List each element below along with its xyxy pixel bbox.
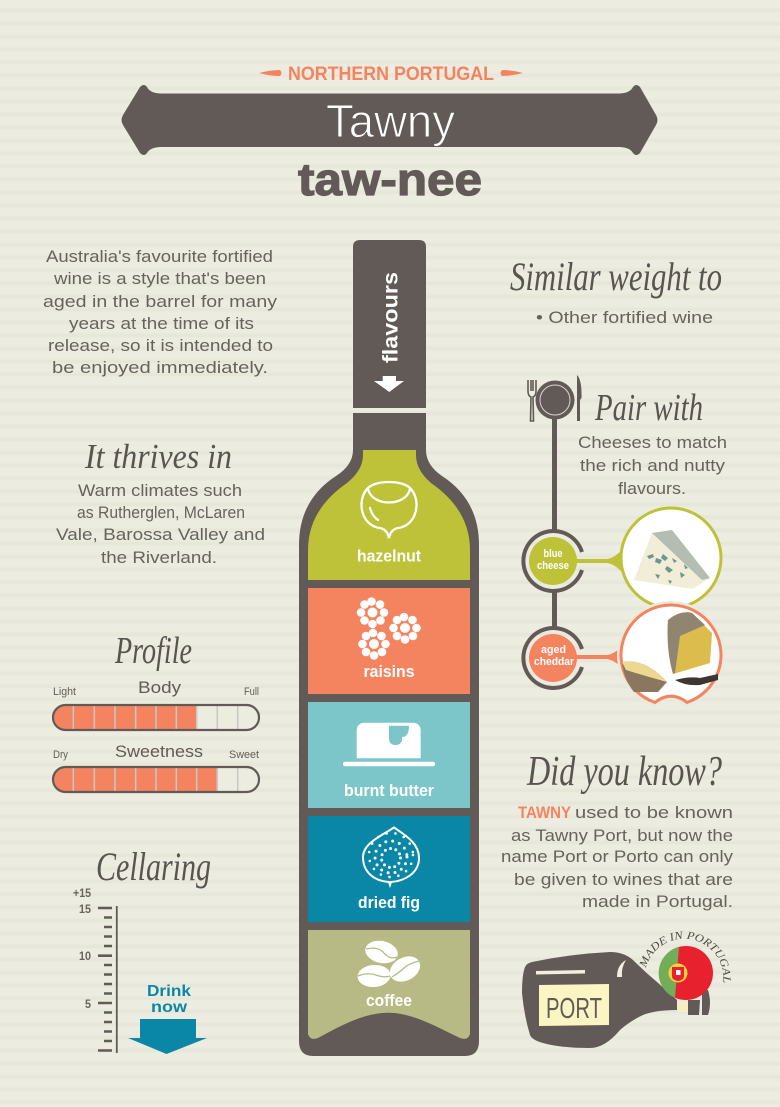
bottle neck with flavours label: flavours xyxy=(380,272,402,363)
intro text xyxy=(43,247,278,377)
flavour: dried fig: dried fig xyxy=(358,893,420,912)
did you know text: as Tawny Port, but now the xyxy=(511,826,733,845)
icon: plate and cutlery with connector xyxy=(528,375,582,630)
pairing text: flavours. xyxy=(618,479,686,498)
pairing: aged cheddar: aged xyxy=(541,644,566,656)
body scale: Body xyxy=(138,678,182,697)
drink now arrow: Drink xyxy=(147,983,191,1000)
similar weight list: • Other fortified wine xyxy=(536,308,713,327)
climate text: as Rutherglen, McLaren xyxy=(77,503,245,522)
cellaring scale: +15 xyxy=(73,886,91,900)
wine bottle xyxy=(299,240,479,1056)
flavour: hazelnut xyxy=(308,450,470,580)
pronunciation: taw-nee xyxy=(298,154,482,205)
heading: profile: Profile xyxy=(114,630,192,672)
photo: cheddar and knife xyxy=(622,612,718,692)
pairing: blue cheese xyxy=(523,508,721,608)
bottle body xyxy=(299,413,479,1056)
cellaring scale: 5 xyxy=(85,997,91,1011)
sweetness scale: Sweetness xyxy=(115,742,203,761)
flavour: dried fig xyxy=(308,816,470,922)
pairing text: Cheeses to match xyxy=(578,433,727,452)
intro text: aged in the barrel for many xyxy=(43,292,278,311)
port bottle illustration xyxy=(522,931,730,1048)
pairing: aged cheddar xyxy=(523,605,721,702)
drink now arrow: now xyxy=(151,999,188,1016)
cellaring scale xyxy=(73,886,117,1053)
intro text: release, so it is intended to xyxy=(48,336,273,355)
sweetness scale xyxy=(53,742,259,792)
cellaring scale: 10 xyxy=(79,949,91,963)
body scale: Light xyxy=(53,686,76,698)
pairing: aged cheddar: cheddar xyxy=(534,656,575,668)
title banner: Tawny xyxy=(326,95,455,147)
flavour: burnt butter: burnt butter xyxy=(344,781,434,800)
climate text: the Riverland. xyxy=(101,548,217,567)
pairing: blue cheese: blue xyxy=(544,548,562,560)
heading: it thrives in: It thrives in xyxy=(84,437,232,476)
flavour: burnt butter xyxy=(308,702,470,808)
bottle neck with flavours label xyxy=(353,240,426,408)
made in portugal text: MADE IN PORTUGAL xyxy=(640,931,730,982)
title banner xyxy=(122,85,658,155)
intro text: years at the time of its xyxy=(69,314,254,333)
sweetness scale: Sweet xyxy=(229,749,259,761)
pairing text xyxy=(578,433,727,498)
pairing text: the rich and nutty xyxy=(580,456,726,475)
climate text: Warm climates such xyxy=(78,481,242,500)
heading: cellaring: Cellaring xyxy=(96,844,211,889)
flavour: raisins: raisins xyxy=(364,662,414,681)
did you know text: TAWNY xyxy=(518,803,572,822)
cellaring scale: 15 xyxy=(79,902,91,916)
did you know text xyxy=(501,803,734,911)
sweetness scale: Dry xyxy=(53,749,68,761)
flavour: raisins xyxy=(308,588,470,694)
heading: did you know: Did you know? xyxy=(526,749,722,795)
header: region label: NORTHERN PORTUGAL xyxy=(288,63,494,85)
intro text: be enjoyed immediately. xyxy=(52,358,268,377)
did you know text: used to be known xyxy=(575,803,733,822)
flavour: hazelnut: hazelnut xyxy=(357,546,421,566)
photo: blue cheese wedge xyxy=(634,530,710,589)
drink now arrow xyxy=(128,983,207,1054)
heading: pair with: Pair with xyxy=(594,387,703,429)
body scale: Full xyxy=(244,686,259,698)
intro text: wine is a style that's been xyxy=(53,269,266,288)
heading: similar weight: Similar weight to xyxy=(510,254,722,299)
did you know text: made in Portugal. xyxy=(582,892,733,911)
port bottle illustration: PORT xyxy=(546,993,602,1025)
Portuguese flag badge xyxy=(659,946,713,1000)
climate text: Vale, Barossa Valley and xyxy=(56,525,265,544)
did you know text: name Port or Porto can only xyxy=(501,847,734,866)
flavour: coffee xyxy=(308,930,470,1039)
pairing: blue cheese: cheese xyxy=(537,560,569,572)
climate text xyxy=(56,481,265,567)
body scale xyxy=(53,678,259,730)
intro text: Australia's favourite fortified xyxy=(46,247,273,266)
flavour: coffee: coffee xyxy=(366,991,412,1010)
did you know text: be given to wines that are xyxy=(514,870,733,889)
